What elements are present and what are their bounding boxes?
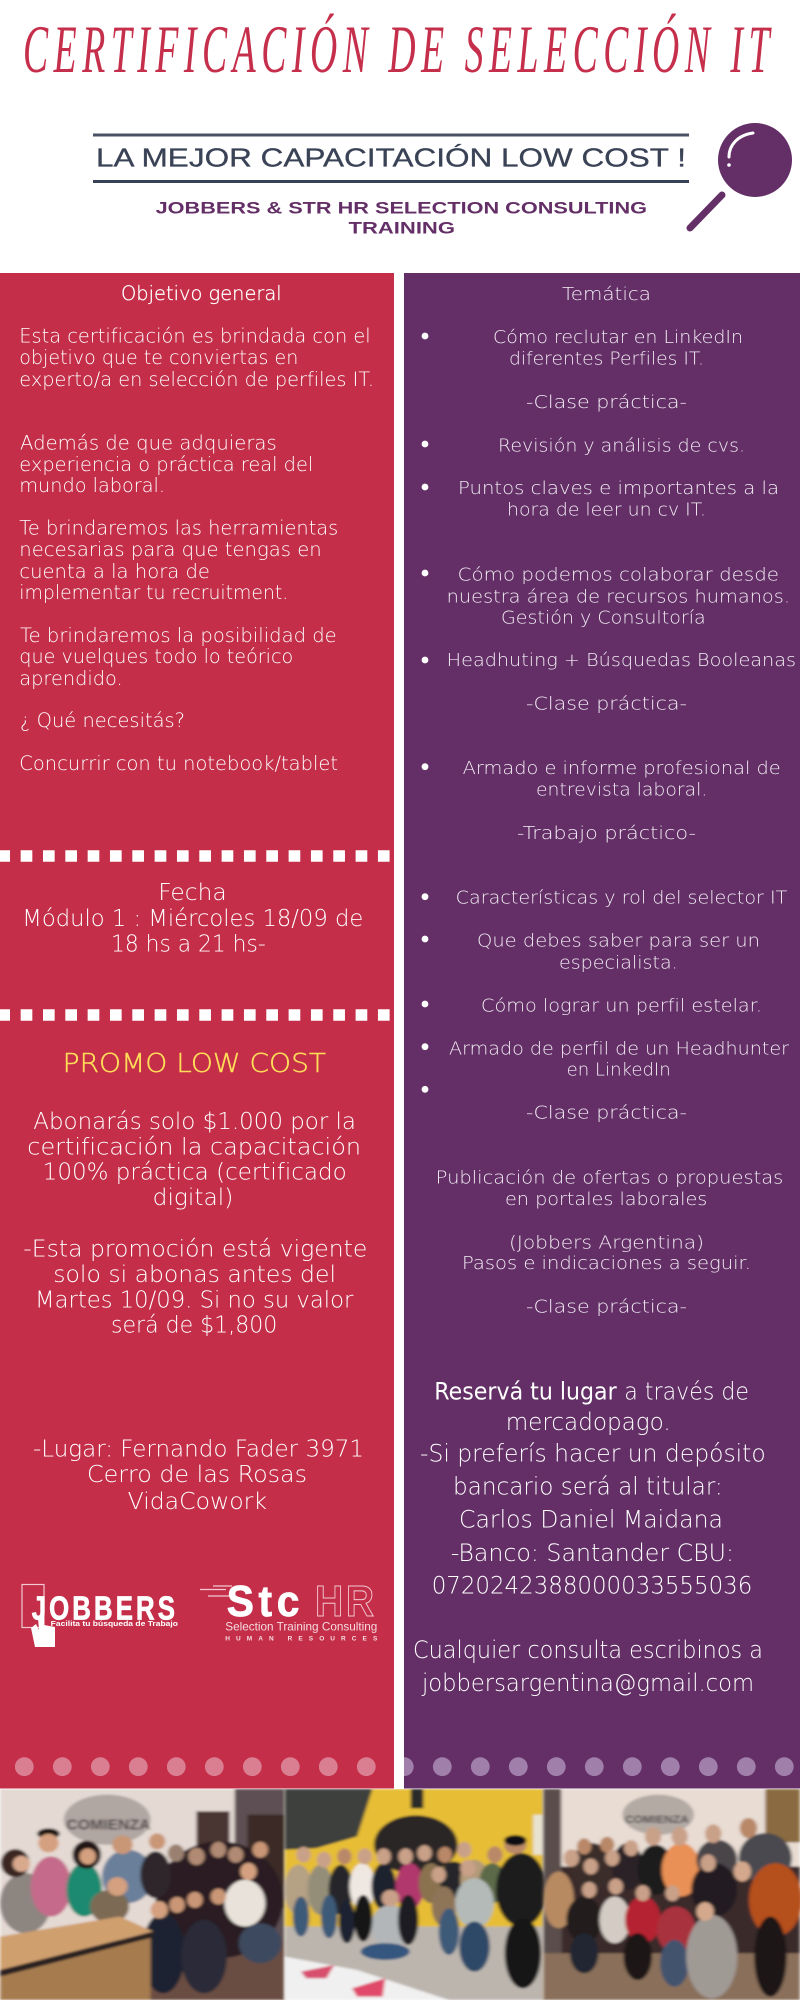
text block: objetivo general: objetivo que te conviertas en bbox=[19, 346, 298, 369]
text block: objetivo general: aprendido. bbox=[19, 667, 123, 690]
photo 1: group at mural bbox=[0, 1789, 285, 2000]
panel: right purple column bbox=[404, 273, 800, 1788]
logo: jobbers: JOBBERS bbox=[32, 1589, 178, 1626]
text block: temática: Temática bbox=[562, 284, 651, 305]
text block: promo details: Martes 10/09. Si no su valor bbox=[35, 1288, 354, 1314]
text block: fecha: 18 hs a 21 hs- bbox=[111, 932, 266, 958]
photo 1: group at mural: COMIENZA bbox=[66, 1817, 151, 1834]
text block: objetivo general: Te brindaremos la posibilidad de bbox=[20, 624, 337, 647]
heading: promo low cost: PROMO LOW COST bbox=[63, 1049, 326, 1079]
text block: temática bbox=[422, 284, 796, 1317]
text block: temática: en portales laborales bbox=[505, 1189, 707, 1210]
photo strip bbox=[0, 1789, 800, 2000]
text block: reserva y datos bancarios: -Si preferís hacer un depósito bbox=[420, 1440, 766, 1468]
subheading: JOBBERS & STR HR SELECTION CONSULTING bbox=[156, 198, 647, 217]
text block: promo details: certificación la capacitación bbox=[27, 1134, 361, 1160]
text block: promo details: Abonarás solo $1.000 por la bbox=[33, 1109, 356, 1135]
text block: temática: Cómo reclutar en LinkedIn bbox=[493, 327, 743, 348]
text block: temática: Publicación de ofertas o propuestas bbox=[436, 1167, 783, 1188]
heading: la mejor capacitación bbox=[93, 134, 689, 183]
icon: magnifying glass bbox=[690, 123, 792, 228]
text block: lugar: Cerro de las Rosas bbox=[87, 1462, 307, 1488]
text block: reserva y datos bancarios: a través de bbox=[624, 1377, 749, 1405]
text block: promo details: solo si abonas antes del bbox=[53, 1262, 336, 1288]
text block: lugar: -Lugar: Fernando Fader 3971 bbox=[33, 1437, 364, 1463]
text block: objetivo general: ¿ Qué necesitás? bbox=[20, 709, 185, 732]
logo: stc hr: HUMAN RESOURCES bbox=[225, 1636, 378, 1643]
photo 3: group at mural bbox=[543, 1789, 800, 2000]
text block: temática: Gestión y Consultoría bbox=[501, 607, 706, 628]
text block: temática: Cómo lograr un perfil estelar. bbox=[481, 996, 762, 1017]
logo: stc hr: HR bbox=[315, 1577, 377, 1626]
text block: objetivo general: Concurrir con tu notebook/tablet bbox=[19, 752, 338, 775]
text block: temática: Revisión y análisis de cvs. bbox=[498, 435, 745, 456]
logo: jobbers bbox=[22, 1584, 178, 1647]
text block: promo details: será de $1,800 bbox=[111, 1313, 277, 1339]
text block: lugar: VidaCowork bbox=[128, 1489, 267, 1515]
text block: objetivo general: Esta certificación es brindada con el bbox=[19, 325, 371, 348]
dots row right bbox=[395, 1757, 794, 1776]
text block: objetivo general: necesarias para que tengas en bbox=[19, 538, 322, 561]
text block: temática: entrevista laboral. bbox=[536, 780, 707, 801]
dots row left bbox=[15, 1757, 376, 1776]
photo 2: group at yellow wall bbox=[284, 1789, 547, 2000]
text block: fecha: Módulo 1 : Miércoles 18/09 de bbox=[22, 906, 363, 932]
text block: promo details: -Esta promoción está vigente bbox=[23, 1237, 367, 1263]
text block: promo details bbox=[23, 1109, 367, 1339]
text block: objetivo general: Te brindaremos las herramientas bbox=[19, 516, 338, 540]
text block: temática: -Trabajo práctico- bbox=[517, 823, 696, 844]
panel: left red column bbox=[0, 273, 394, 1788]
logo: jobbers: Facilita tu búsqueda de Trabajo bbox=[51, 1619, 178, 1628]
text block: temática: especialista. bbox=[559, 952, 678, 973]
text block: reserva y datos bancarios: mercadopago. bbox=[506, 1408, 671, 1436]
text block: consulta: Cualquier consulta escribinos a bbox=[413, 1636, 763, 1664]
dashed divider top bbox=[0, 850, 391, 862]
text block: consulta bbox=[413, 1636, 763, 1697]
text block: fecha: Fecha bbox=[158, 880, 227, 906]
text block: objetivo general: implementar tu recruitment. bbox=[19, 581, 288, 604]
text block: lugar bbox=[33, 1437, 364, 1515]
text block: objetivo general: Además de que adquieras bbox=[20, 432, 277, 455]
text block: reserva y datos bancarios: bancario será al titular: bbox=[453, 1472, 723, 1500]
text block: objetivo general: experiencia o práctica real del bbox=[19, 453, 313, 476]
text block: temática: Armado de perfil de un Headhunter bbox=[449, 1038, 790, 1059]
text block: reserva y datos bancarios: Carlos Daniel Maidana bbox=[459, 1506, 723, 1534]
text block: objetivo general: Objetivo general bbox=[121, 282, 282, 305]
bullet list markers bbox=[422, 333, 428, 1093]
text block: temática: -Clase práctica- bbox=[526, 1102, 687, 1123]
text block: temática: en LinkedIn bbox=[567, 1060, 671, 1081]
text block: temática: Armado e informe profesional de bbox=[463, 758, 781, 779]
text block: objetivo general: que vuelques todo lo teórico bbox=[19, 645, 293, 668]
text block: consulta: jobbersargentina@gmail.com bbox=[421, 1669, 754, 1697]
text block: temática: Que debes saber para ser un bbox=[477, 931, 760, 952]
text block: temática: hora de leer un cv IT. bbox=[507, 499, 706, 520]
text block: promo details: digital) bbox=[153, 1185, 233, 1211]
subheading bbox=[156, 198, 647, 237]
text block: temática: Cómo podemos colaborar desde bbox=[458, 565, 779, 586]
photo 3: group at mural: COMIENZA bbox=[625, 1814, 689, 1826]
text block: objetivo general: cuenta a la hora de bbox=[19, 560, 210, 583]
text block: temática: nuestra área de recursos humanos. bbox=[447, 586, 790, 607]
subheading: TRAINING bbox=[348, 218, 455, 237]
logo: stc hr bbox=[200, 1577, 378, 1643]
text block: reserva y datos bancarios: -Banco: Santander CBU: bbox=[451, 1539, 734, 1567]
text block: fecha bbox=[22, 880, 363, 958]
heading: la mejor capacitación: LA MEJOR CAPACITACIÓN LOW COST ! bbox=[96, 144, 686, 173]
text block: temática: Pasos e indicaciones a seguir. bbox=[462, 1253, 751, 1274]
text block: objetivo general: experto/a en selección de perfiles IT. bbox=[19, 368, 374, 391]
logo: stc hr: Stc bbox=[227, 1577, 304, 1626]
text block: objetivo general: mundo laboral. bbox=[19, 474, 165, 497]
text block: temática: -Clase práctica- bbox=[526, 1296, 687, 1317]
text block: temática: Headhuting + Búsquedas Booleanas bbox=[447, 650, 796, 671]
text block: temática: -Clase práctica- bbox=[526, 693, 687, 714]
logo: stc hr: Selection Training Consulting bbox=[225, 1620, 377, 1634]
text block: temática: -Clase práctica- bbox=[526, 392, 687, 413]
text block: temática: Puntos claves e importantes a la bbox=[458, 478, 779, 499]
text block: reserva y datos bancarios bbox=[420, 1377, 766, 1599]
text block: temática: Características y rol del selector IT bbox=[456, 887, 787, 908]
text block: temática: (Jobbers Argentina) bbox=[509, 1232, 704, 1253]
text block: temática: diferentes Perfiles IT. bbox=[509, 349, 704, 370]
text block: objetivo general bbox=[19, 282, 374, 775]
text block: promo details: 100% práctica (certificado bbox=[43, 1159, 347, 1185]
text block: reserva y datos bancarios: 0720242388000033555036 bbox=[432, 1571, 752, 1599]
dashed divider bottom bbox=[0, 1009, 391, 1021]
text block: reserva y datos bancarios: Reservá tu lugar bbox=[434, 1377, 617, 1405]
